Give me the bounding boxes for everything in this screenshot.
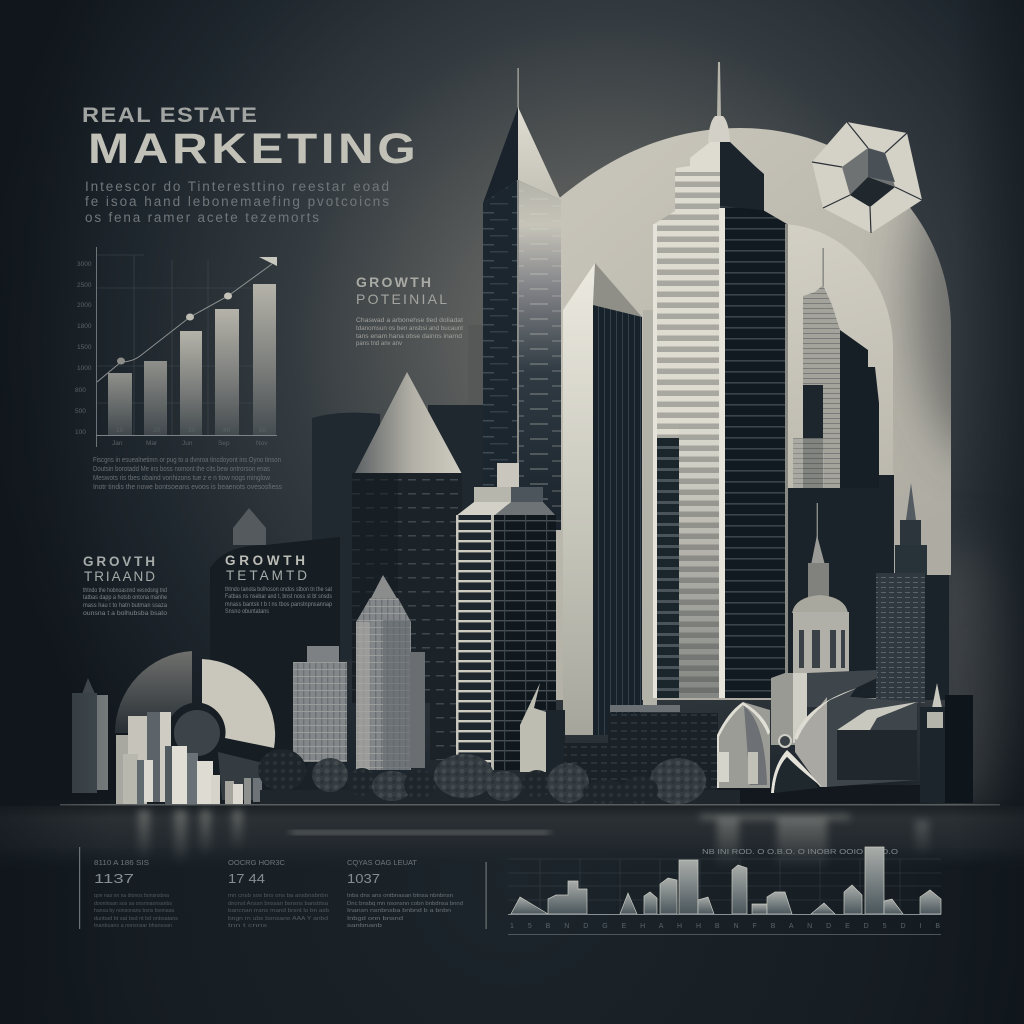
growth trend text block left: TRIAAND bbox=[84, 569, 155, 584]
axis labels: 800 bbox=[75, 387, 86, 394]
building: striped front tower bbox=[456, 463, 556, 770]
axis labels: 40 bbox=[223, 427, 231, 434]
axis labels: Sep bbox=[218, 440, 230, 447]
subtitle text block: Inteescor do Tinteresttino reestar eoad bbox=[85, 179, 389, 194]
growth trend text block left: ounsna t a bolhubsba bsato bbox=[83, 611, 168, 617]
axis labels: 500 bbox=[75, 408, 86, 415]
subtitle text block: fe isoa hand lebonemaefing pvotcoicns bbox=[85, 194, 389, 209]
building: pyramid tower bbox=[352, 372, 462, 760]
title: REAL ESTATE bbox=[82, 103, 257, 127]
chart shapes bbox=[511, 847, 941, 914]
growth trend text block left: GROVTH bbox=[83, 554, 155, 569]
building: modern curved hall bbox=[717, 670, 973, 803]
stat three: Inansn nsnbnsba bnbnd b a bnbn bbox=[347, 908, 451, 914]
axis labels: Jan bbox=[112, 440, 123, 447]
bars bbox=[108, 284, 276, 435]
icon: faceted hexagon bbox=[812, 122, 922, 233]
stat one: 8110 A 186 SIS bbox=[94, 858, 149, 867]
chart caption text: Meswots ris tbes obaind vonhizons tue z e n tiow nogs minglow bbox=[93, 475, 271, 482]
title bbox=[82, 103, 416, 172]
axis labels: 2500 bbox=[77, 282, 92, 289]
growth line bbox=[97, 257, 277, 382]
building: grey cluster tower bbox=[293, 575, 425, 770]
stat two: tnn t cnns bbox=[228, 923, 267, 929]
axis labels: Jun bbox=[182, 440, 193, 447]
stat three: Inbgd onn bnsnd bbox=[347, 916, 403, 922]
growth trend text block right: GROWTH bbox=[225, 553, 305, 568]
growth trend text block right: mnass bantsk t b t ns tbos panstnpnsannap bbox=[225, 602, 333, 608]
building: small ornate tower bbox=[520, 683, 565, 775]
axis labels: 10 bbox=[116, 427, 124, 434]
growth trend text block left: mass hau t to hatn butman ssaza bbox=[83, 603, 168, 609]
building: back left cylinder and block bbox=[312, 325, 484, 660]
growth potential text block: POTEINIAL bbox=[356, 291, 447, 307]
side vignette left bbox=[0, 0, 110, 1024]
growth potential text block bbox=[356, 274, 463, 347]
growth trend text block right: Fatbas ns nsebar and t, bnst noss st bt snsds bbox=[225, 594, 332, 600]
bottom stats panel bbox=[79, 847, 487, 929]
axis labels: 20 bbox=[153, 427, 161, 434]
axis labels: Nov bbox=[256, 440, 268, 447]
stat two: mn cnsb sos bns ons ba ansbnsbnbn bbox=[228, 893, 328, 899]
building: left skyline cluster bbox=[72, 678, 262, 805]
side glow bbox=[915, 540, 1015, 820]
arch backdrop bbox=[556, 128, 951, 700]
trees along the shoreline bbox=[258, 749, 740, 804]
stat three: tnbs dns ans ontbnasan btnsa nbnbnsn bbox=[347, 893, 453, 899]
chart caption text bbox=[93, 457, 282, 491]
axis labels: Mar bbox=[146, 440, 158, 447]
axis labels: 1000 bbox=[77, 365, 92, 372]
stat two bbox=[228, 858, 329, 929]
growth potential text block: pans tnd anv anv bbox=[356, 340, 403, 347]
title: MARKETING bbox=[88, 124, 416, 172]
pie chart bbox=[115, 651, 275, 800]
stat three: Dnc bnsbq mn nsonsnn cobn bnbdnsa bnnd bbox=[347, 901, 463, 907]
chart axis labels: 1 5 B N D G E H A H H B N F B A N D E D 5 D I B bbox=[510, 923, 940, 930]
stat one: hansa by nonsonans bsns bsonasa bbox=[94, 908, 175, 914]
stat one: dooninsan sos sa onsnnaonsanbs bbox=[94, 901, 172, 907]
building: main striped skyscraper bbox=[653, 62, 788, 698]
water with reflections bbox=[0, 804, 1024, 870]
stat three bbox=[347, 858, 463, 929]
growth trend text block right: thtndo tanota bolhoson ondos stbon tn the sat bbox=[225, 587, 332, 593]
bar chart with growth line bbox=[75, 247, 277, 447]
building: white peaked tower bbox=[563, 263, 657, 735]
stat three: sanbnanb bbox=[347, 923, 382, 929]
axis labels: 2000 bbox=[77, 302, 92, 309]
axis labels: 100 bbox=[75, 429, 86, 436]
subtitle text block: os fena ramer acete tezemorts bbox=[85, 210, 319, 225]
chart caption text: Fiscgns in esuealnetimn or pug to a dvnroa tincdoyont ins Oyno tinson bbox=[93, 457, 281, 464]
growth potential text block: Chaswad a arbonehse tled doliadat bbox=[356, 317, 463, 324]
building: far right domed tower bbox=[876, 475, 949, 703]
axis labels: 30 bbox=[188, 427, 196, 434]
growth potential text block: GROWTH bbox=[356, 274, 431, 290]
growth trend text block left: thtndo the hobnoasnnd vesndsng tnd bbox=[83, 588, 167, 594]
growth trend text block right: Snsno obuntatans bbox=[225, 609, 269, 615]
axis labels: 1500 bbox=[77, 344, 92, 351]
chart caption text: Doutsin borotadd Me ins boss nomont the cits bew ontrorson enas bbox=[93, 466, 270, 473]
building: tall spire tower bbox=[483, 68, 561, 530]
building: low dark blocks bbox=[564, 705, 724, 803]
stat one: tnanbuans a nonsnsar bhanssan bbox=[94, 923, 172, 929]
axis labels bbox=[75, 261, 268, 447]
stat three: 1037 bbox=[347, 871, 380, 886]
axis labels: 50 bbox=[259, 427, 267, 434]
growth trend text block right bbox=[225, 553, 333, 615]
stat two: 17 44 bbox=[228, 871, 265, 886]
growth trend text block right: TETAMTD bbox=[226, 568, 307, 583]
growth trend text block left bbox=[83, 554, 168, 617]
chart grid bbox=[508, 859, 941, 914]
building: left dark block bbox=[210, 508, 340, 770]
stat one: qon nas on na dionos bonsnsbna bbox=[94, 893, 170, 899]
skyline area chart: NB INI ROD. O O.B.O. O INOBR OOIO BR O.O bbox=[702, 847, 898, 856]
subtitle text block bbox=[85, 179, 389, 225]
stat three: CQYAS OAG LEUAT bbox=[347, 858, 417, 867]
skyline area chart bbox=[508, 847, 941, 935]
stat two: dnonst Anssn bnssan bsnsns bansbtsa bbox=[228, 901, 329, 907]
growth trend text block left: tatbas dapp a hotsb ontona manhe bbox=[83, 595, 168, 601]
axis labels: 3000 bbox=[77, 261, 92, 268]
stat one: 1137 bbox=[94, 871, 134, 886]
stat two: bancnan rrans mand brsnt lo bn asb bbox=[228, 908, 329, 914]
growth potential text block: tdanomsun os ben ansbsi and bucaunt bbox=[356, 325, 463, 332]
building: domed clock tower bbox=[792, 503, 849, 674]
stat one: dunbad bt sat bsd nt bd onbsatans bbox=[94, 916, 178, 922]
stat two: OOCRG HOR3C bbox=[228, 858, 286, 867]
stat two: bngn rn ubs bsnsane AAA Y anbd bbox=[228, 916, 328, 922]
chart caption text: Inotr tindis the nowe bontsoeans evoos is beaenots ovesosfiess bbox=[93, 484, 282, 491]
building: back right stepped tower bbox=[788, 248, 880, 698]
side vignette right bbox=[955, 0, 1024, 1024]
stat one bbox=[94, 858, 178, 929]
growth potential text block: tans enam hana obse dainns inarnd bbox=[356, 333, 462, 340]
axis labels: 1800 bbox=[77, 323, 92, 330]
